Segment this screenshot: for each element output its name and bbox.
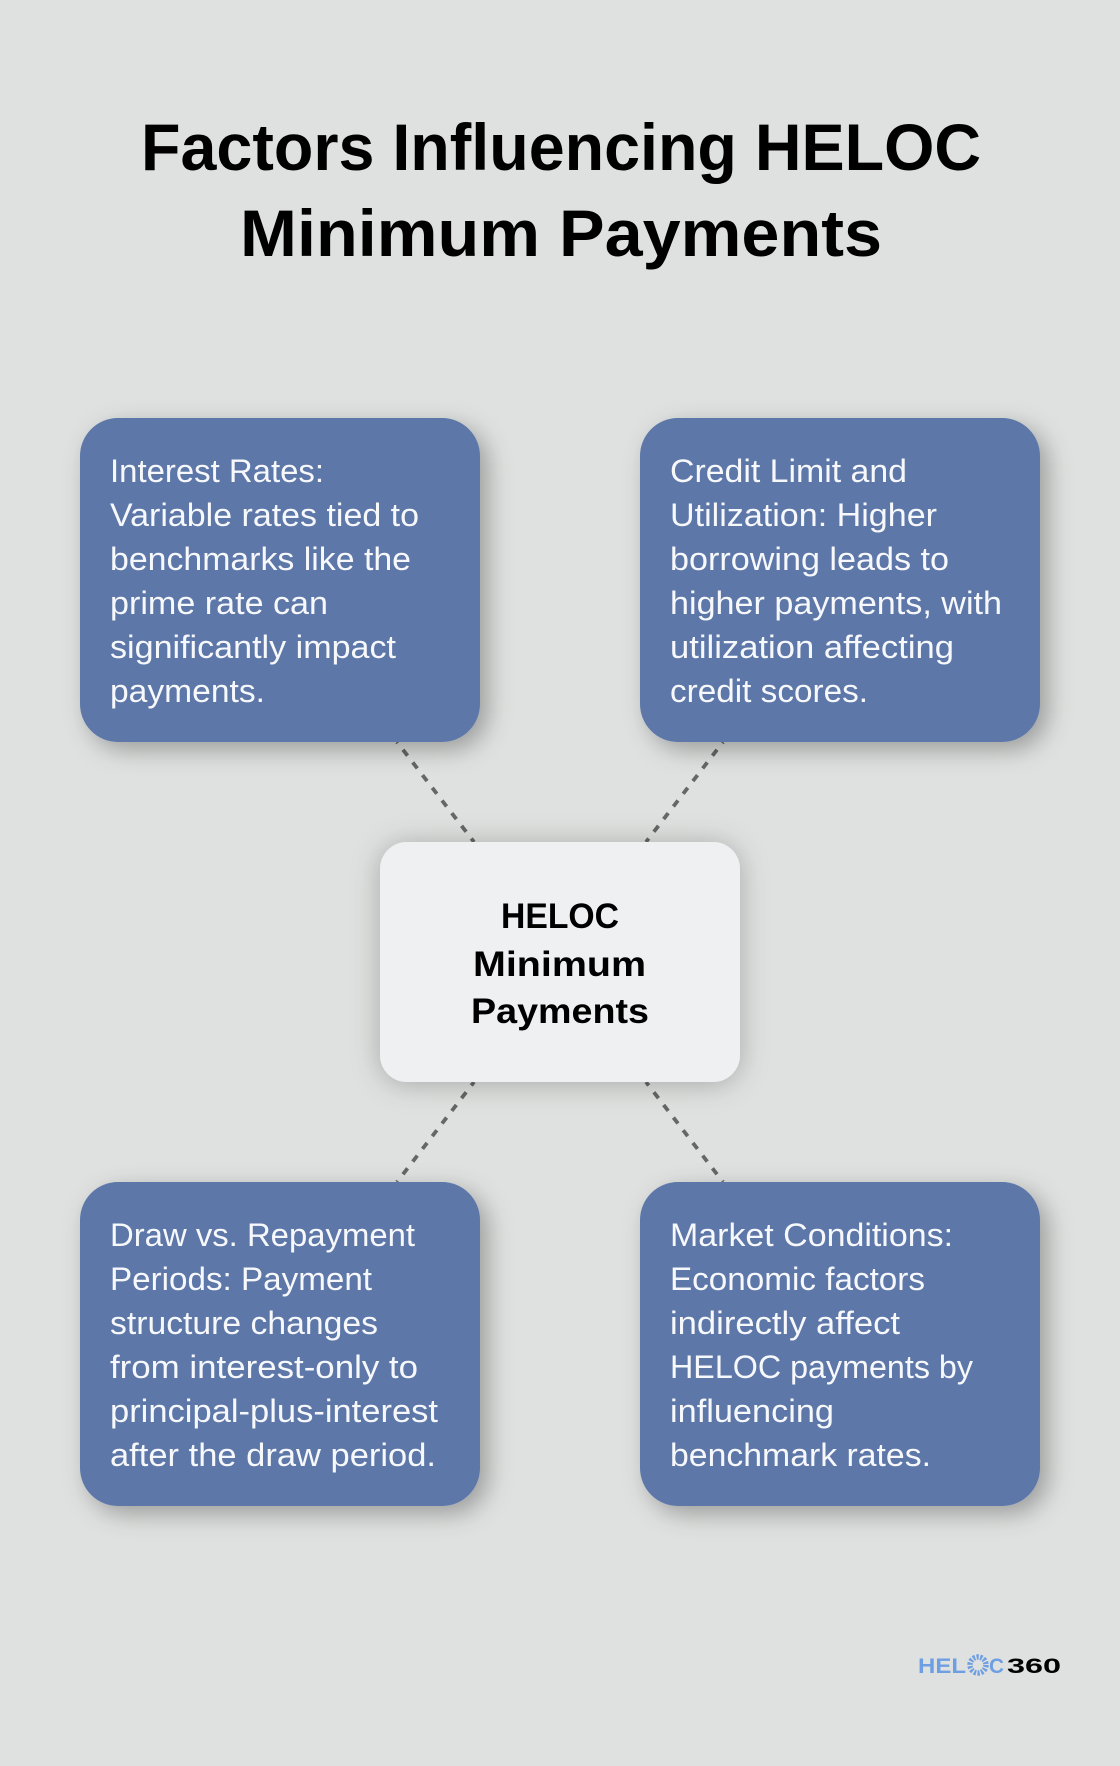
panel: draw vs repayment periods	[80, 1182, 480, 1506]
connector: center to draw vs repayment	[397, 1082, 474, 1182]
connector: interest rates to center	[397, 742, 474, 842]
panel: interest rates: significantly impact	[110, 629, 396, 665]
panel: credit limit and utilization: borrowing leads to	[670, 541, 949, 577]
panel: market conditions: influencing	[670, 1393, 834, 1429]
logo: HELOC360	[918, 1655, 1061, 1678]
panel: draw vs repayment periods: Periods: Payment	[110, 1261, 372, 1297]
panel: draw vs repayment periods: principal-plus-interest	[110, 1393, 438, 1429]
logo: HELOC360: HEL	[918, 1655, 966, 1678]
panel: credit limit and utilization: Credit Limit and	[670, 453, 907, 489]
panel: draw vs repayment periods: Draw vs. Repayment	[110, 1217, 415, 1253]
logo: HELOC360: C	[989, 1655, 1004, 1678]
panel: interest rates: Variable rates tied to	[110, 497, 419, 533]
logo: HELOC360: 360	[1007, 1655, 1061, 1678]
panel: interest rates: benchmarks like the	[110, 541, 411, 577]
panel: credit limit and utilization: Utilization: Higher	[670, 497, 937, 533]
panel: interest rates: prime rate can	[110, 585, 328, 621]
connector: center to market conditions	[646, 1082, 723, 1182]
panel: credit limit and utilization	[640, 418, 1040, 742]
panel: draw vs repayment periods: from interest-only to	[110, 1349, 418, 1385]
panel: center HELOC minimum payments: HELOC	[501, 897, 619, 936]
title: Minimum Payments	[240, 196, 882, 270]
panel: center HELOC minimum payments: Payments	[471, 992, 649, 1031]
panel: center HELOC minimum payments	[380, 842, 740, 1082]
panel: market conditions: Economic factors	[670, 1261, 925, 1297]
panel: market conditions: benchmark rates.	[670, 1437, 931, 1473]
panel: interest rates: Interest Rates:	[110, 453, 324, 489]
connector: credit limit to center	[646, 742, 723, 842]
panel: center HELOC minimum payments: Minimum	[473, 945, 646, 984]
panel: market conditions	[640, 1182, 1040, 1506]
panel: credit limit and utilization: utilization affecting	[670, 629, 954, 665]
panel: interest rates	[80, 418, 480, 742]
panel: market conditions: indirectly affect	[670, 1305, 900, 1341]
panel: interest rates: payments.	[110, 673, 265, 709]
panel: credit limit and utilization: credit scores.	[670, 673, 868, 709]
title	[141, 110, 981, 270]
panel: market conditions: Market Conditions:	[670, 1217, 953, 1253]
panel: market conditions: HELOC payments by	[670, 1349, 973, 1385]
panel: draw vs repayment periods: structure changes	[110, 1305, 378, 1341]
panel: credit limit and utilization: higher payments, with	[670, 585, 1002, 621]
title: Factors Influencing HELOC	[141, 110, 981, 184]
panel: draw vs repayment periods: after the draw period.	[110, 1437, 436, 1473]
